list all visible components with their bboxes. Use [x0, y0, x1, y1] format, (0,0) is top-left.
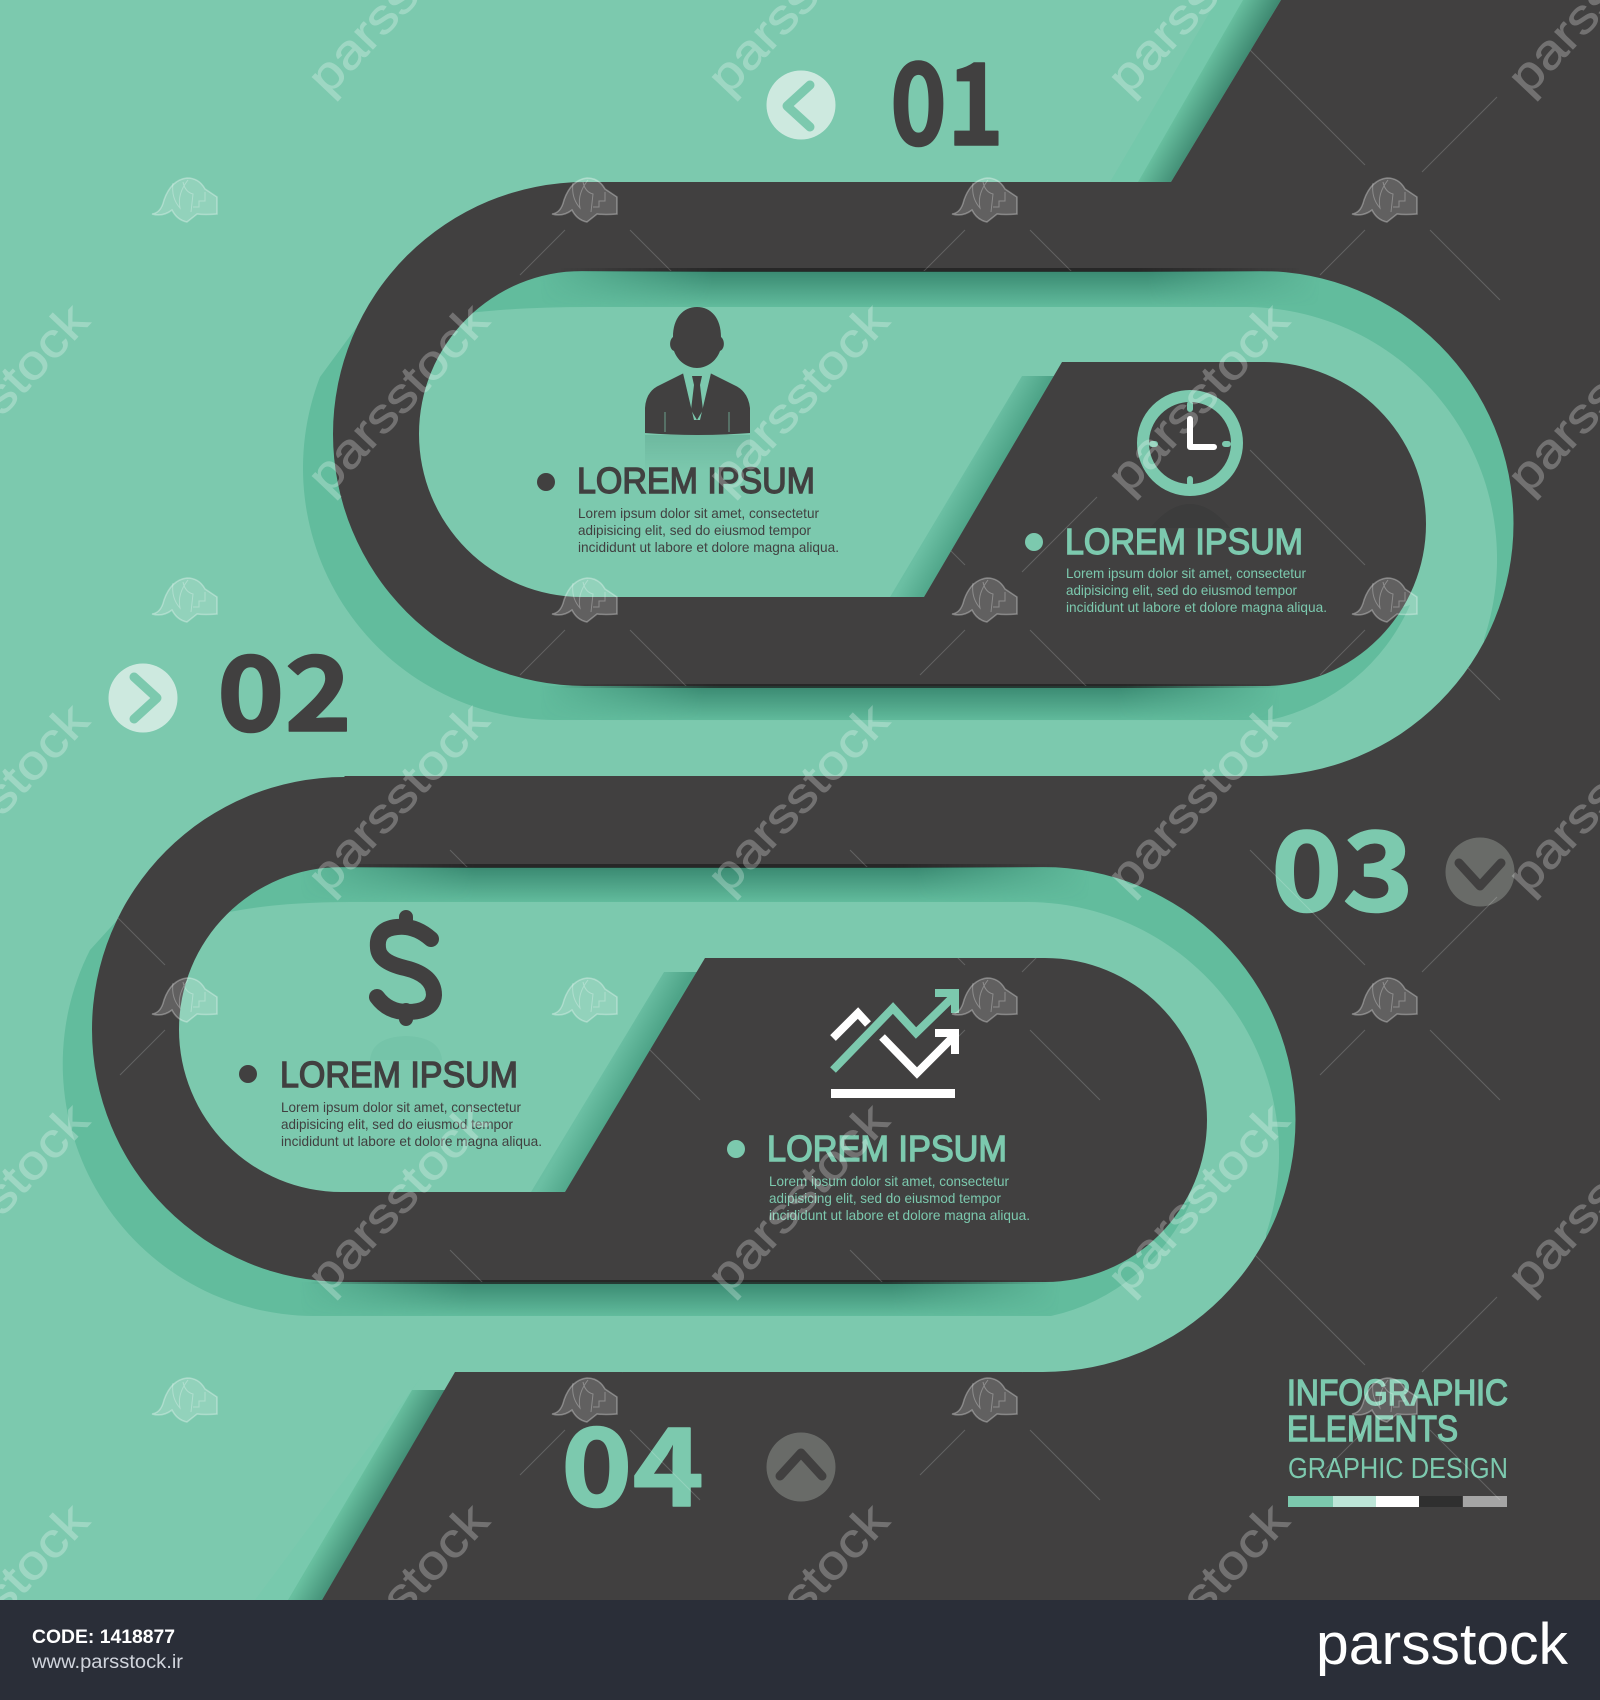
panel: lower ring shading	[62, 867, 1296, 1316]
text block: item one: LOREM IPSUM	[577, 460, 815, 501]
watermark: parsstock text: parsstock	[1097, 693, 1300, 904]
panel: ribbon edge lines	[310, 268, 1300, 1284]
icon: clock	[1143, 396, 1237, 528]
watermark: elephants	[152, 178, 1417, 1422]
panel: corner diagonal shadows	[255, 0, 1281, 1600]
icon: trend chart	[831, 993, 955, 1098]
watermark: parsstock text: parsstock	[297, 1493, 500, 1700]
text block: item one: adipisicing elit, sed do eiusmod tempor	[578, 522, 811, 538]
step 02 marker	[108, 610, 352, 761]
text block: item two: Lorem ipsum dolor sit amet, consectetur	[1066, 565, 1306, 581]
watermark: parsstock text: parsstock	[297, 1093, 500, 1304]
watermark: hairlines on dark areas	[50, 50, 1500, 1500]
text block: item two: incididunt ut labore et dolore magna aliqua.	[1066, 599, 1327, 615]
text block: item four: adipisicing elit, sed do eiusmod tempor	[769, 1190, 1001, 1206]
footer bar: parsstock	[1316, 1612, 1569, 1677]
text block: item four: LOREM IPSUM	[767, 1128, 1007, 1169]
footer bar	[0, 1600, 1600, 1700]
text block: item three	[239, 1054, 542, 1149]
watermark: parsstock text: parsstock	[1097, 293, 1300, 504]
step 02 marker: 02	[217, 610, 352, 761]
watermark: parsstock text: parsstock	[297, 693, 500, 904]
watermark: parsstock text: parsstock	[697, 1493, 900, 1700]
watermark: parsstock text: parsstock	[697, 693, 900, 904]
step 04 marker	[561, 1382, 836, 1538]
panel: upper ring shading	[303, 271, 1514, 720]
footer bar: www.parsstock.ir	[31, 1652, 184, 1673]
title block: ELEMENTS	[1287, 1408, 1458, 1449]
step 04 marker: 04	[561, 1382, 704, 1538]
step 01 marker: 01	[890, 13, 1004, 178]
watermark: parsstock text: parsstock	[697, 293, 900, 504]
text block: item four: incididunt ut labore et dolore magna aliqua.	[769, 1207, 1030, 1223]
step 03 marker: 03	[1271, 783, 1414, 943]
watermark: parsstock text: parsstock	[297, 293, 500, 504]
icon: businessman	[645, 307, 750, 471]
watermark: parsstock text: parsstock	[1097, 1093, 1300, 1304]
text block: item three: adipisicing elit, sed do eiusmod tempor	[281, 1116, 513, 1132]
text block: item two	[1025, 521, 1327, 615]
title block: GRAPHIC DESIGN	[1288, 1453, 1508, 1485]
text block: item one: incididunt ut labore et dolore magna aliqua.	[578, 539, 839, 555]
step 03 marker	[1271, 783, 1514, 943]
footer bar: CODE: 1418877	[32, 1627, 175, 1648]
watermark: parsstock text: parsstock	[1097, 1493, 1300, 1700]
text block: item three: incididunt ut labore et dolore magna aliqua.	[281, 1133, 542, 1149]
colour swatch legend	[1288, 1496, 1507, 1507]
text block: item two: adipisicing elit, sed do eiusmod tempor	[1066, 582, 1297, 598]
text block: item four: Lorem ipsum dolor sit amet, consectetur	[769, 1173, 1009, 1189]
text block: item three: LOREM IPSUM	[280, 1054, 518, 1095]
text block: item three: Lorem ipsum dolor sit amet, consectetur	[281, 1099, 521, 1115]
text block: item one	[537, 460, 839, 555]
text block: item four	[727, 1128, 1030, 1223]
icon: dollar sign	[370, 917, 442, 1060]
text block: item two: LOREM IPSUM	[1065, 521, 1303, 562]
watermark: parsstock text: parsstock	[697, 1093, 900, 1304]
title block	[1287, 1372, 1508, 1485]
step 01 marker	[766, 13, 1004, 178]
title block: INFOGRAPHIC	[1287, 1372, 1508, 1413]
text block: item one: Lorem ipsum dolor sit amet, consectetur	[578, 505, 819, 521]
